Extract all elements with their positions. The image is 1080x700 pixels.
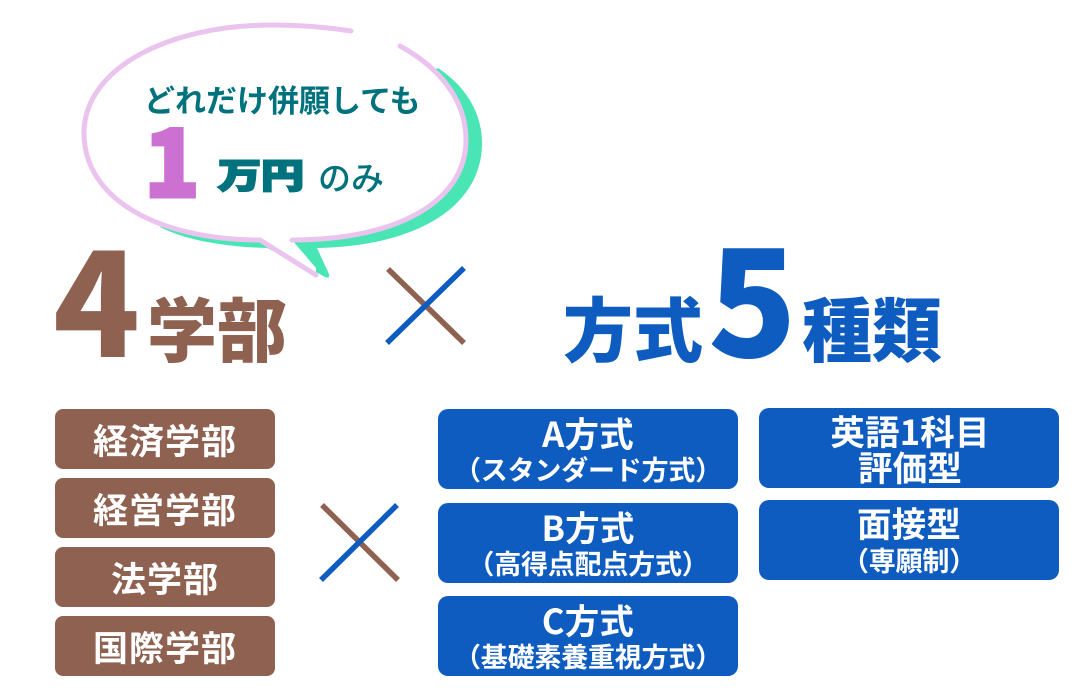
faculty: economics: 経済学部 <box>93 414 237 465</box>
method English: 英語1科目 <box>830 405 990 455</box>
faculty: international <box>55 616 275 676</box>
faculty list <box>55 409 275 676</box>
method C: （基礎素養重視方式） <box>454 636 722 675</box>
method B <box>438 503 738 583</box>
method A: A方式 <box>542 407 634 457</box>
method B: B方式 <box>541 501 635 551</box>
method C: C方式 <box>542 594 634 644</box>
faculty: international: 国際学部 <box>93 621 237 672</box>
method English: 評価型 <box>858 441 962 491</box>
method C <box>438 596 738 676</box>
method interview: 面接型 <box>857 497 961 547</box>
label method: 方式 <box>563 276 703 377</box>
faculty: business: 経営学部 <box>93 483 237 534</box>
method interview <box>759 500 1059 580</box>
speech bubble <box>82 22 482 278</box>
label faculties: 学部 <box>147 276 287 377</box>
heading: 5 methods <box>563 189 942 400</box>
bubble text: only: のみ <box>318 152 384 200</box>
faculty: economics <box>55 409 275 469</box>
bubble shadow <box>160 68 482 278</box>
faculty: law <box>55 547 275 607</box>
numeral 5: 5 <box>708 189 797 400</box>
method interview: （専願制） <box>842 540 976 579</box>
faculty: business <box>55 478 275 538</box>
bubble number 1: 1 <box>144 91 200 224</box>
numeral 4: 4 <box>53 192 140 399</box>
heading: 4 faculties <box>53 192 287 399</box>
method A: （スタンダード方式） <box>454 449 722 488</box>
method English <box>759 408 1059 488</box>
label types: 種類 <box>802 276 942 377</box>
bubble outline <box>84 25 466 275</box>
bubble text: man-yen: 万円 <box>218 149 304 199</box>
method A <box>438 409 738 489</box>
faculty: law: 法学部 <box>111 552 219 603</box>
method B: （高得点配点方式） <box>467 543 709 582</box>
bubble text: line 1: どれだけ併願しても <box>144 76 421 121</box>
